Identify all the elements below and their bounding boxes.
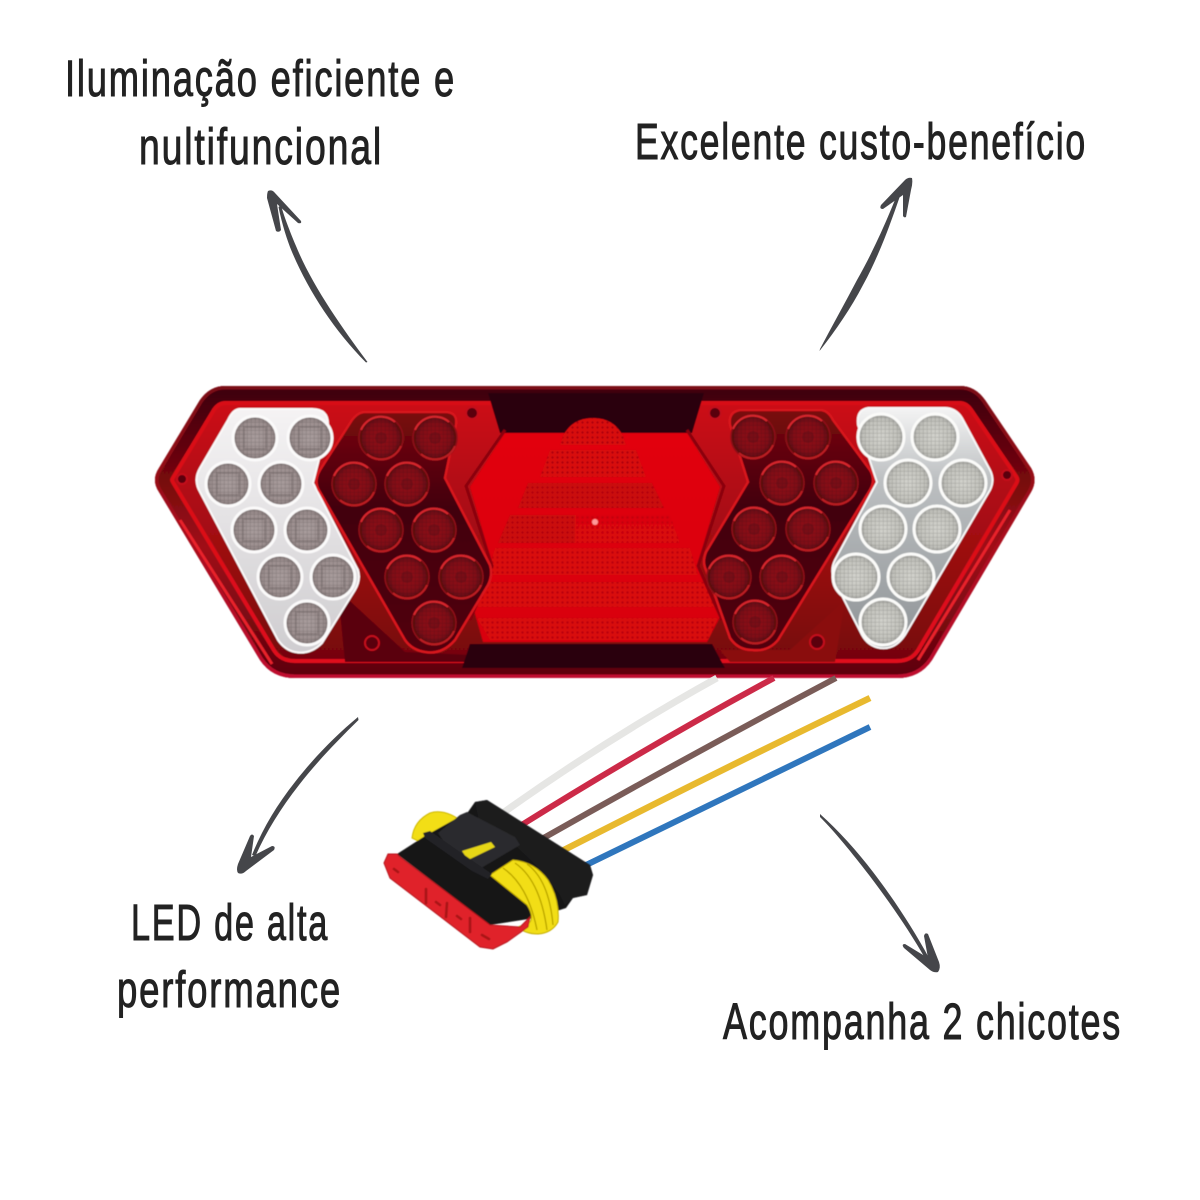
center lens [470,433,720,642]
wire: blue [580,727,870,868]
latch bar [423,831,492,879]
heading: LED de alta performance [117,894,342,1018]
lower panel shadows [338,590,470,662]
connector body [397,800,593,925]
rear plate [475,800,593,905]
mounting screws [177,407,1012,650]
side yellow seal [490,860,558,934]
connector [384,800,593,949]
latch top [438,812,520,870]
latch window [462,842,495,860]
left chevron frame [466,430,505,620]
left red LED cluster [316,412,491,652]
face slots [394,869,489,939]
wiring harness [500,678,870,868]
left white LED cluster [196,409,359,653]
arrow: top left [267,190,368,362]
reflector triangle [476,418,718,640]
wire: white [500,678,717,815]
arrow: top right [820,178,912,351]
center dark bands [462,393,725,668]
wire: red [520,678,774,826]
red front face [384,854,530,949]
wire: yellow [560,698,870,852]
heading: LED de alta performance: LED de alta [131,894,329,951]
right chevron frame [687,430,724,620]
arrow: bottom left [237,717,358,874]
wire: brown [540,678,836,840]
heading: LED de alta performance: performance [117,961,342,1018]
heading: Iluminação eficiente e multifuncional: Iluminação eficiente e [65,50,456,107]
right white LED cluster [832,408,992,648]
photo: LED tail lamp [150,384,1040,680]
rear yellow seal [412,812,465,842]
lamp housing [150,384,1040,680]
arrow: bottom right [820,814,940,972]
heading: Iluminação eficiente e multifuncional: nultifuncional [139,118,383,175]
right red LED cluster [704,410,873,650]
heading: Iluminação eficiente e multifuncional [65,50,456,175]
